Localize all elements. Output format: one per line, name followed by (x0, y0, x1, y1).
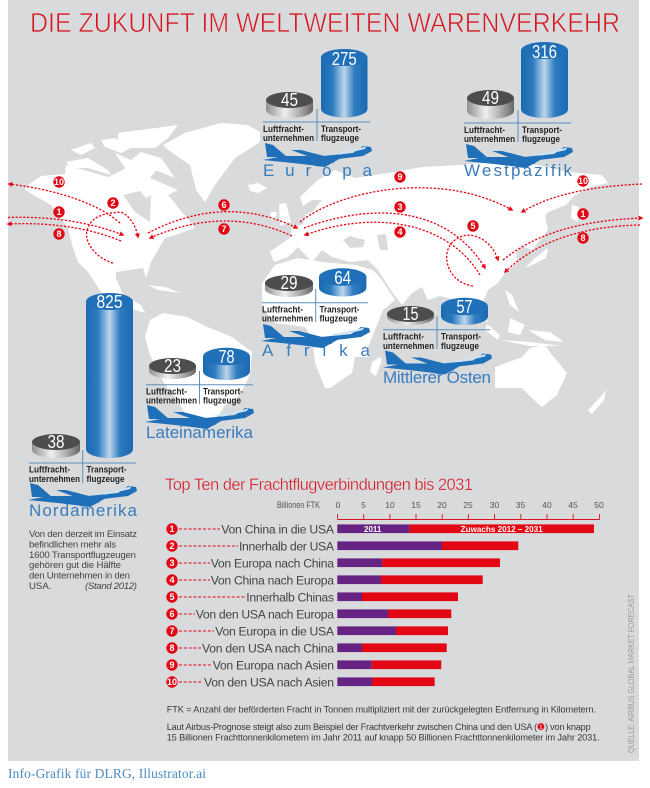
region block: Westpazifik: Luftfracht- (464, 125, 505, 136)
chart row 1: Von China in die USA (221, 522, 335, 536)
chart row 1: 1 (169, 524, 175, 534)
route number markers: 1 (56, 207, 62, 217)
region block: Nordamerika: 825 (96, 292, 122, 312)
region block: Europa: 45 (281, 90, 298, 110)
chart row 7: 7 (169, 626, 175, 636)
region block: Europa: unternehmen (263, 133, 314, 144)
region block: Lateinamerika: Lateinamerika (146, 423, 254, 442)
region block: Nordamerika: Transport- (86, 464, 126, 476)
chart row 6: 6 (169, 609, 175, 619)
region block: Mittlerer Osten: Transport- (441, 332, 481, 342)
text block: footnotes: Laut Airbus-Prognose steigt also zum Beispiel der Frachtverkehr zwischen China und den USA (❶) von knapp (167, 722, 591, 733)
region block: Westpazifik: Westpazifik (464, 161, 572, 180)
region block: Europa: Luftfracht- (263, 124, 304, 135)
chart title: Top Ten der Frachtflugverbindungen bis 2031 (165, 476, 473, 494)
region block: Europa (263, 49, 373, 180)
region block: Lateinamerika: 23 (164, 356, 181, 376)
footer credit: Info-Grafik für DLRG, Illustrator.ai (8, 766, 206, 781)
chart row 6 (166, 607, 451, 621)
bar chart axis: 10 (385, 500, 395, 510)
bar chart axis: 35 (516, 500, 525, 510)
region block: Lateinamerika: Luftfracht- (146, 386, 187, 398)
bar chart axis: Billionen FTK (277, 500, 320, 510)
region block: Afrika (261, 268, 371, 360)
chart row 3: Von Europa nach China (211, 556, 334, 570)
region block: Europa: flugzeuge (321, 133, 359, 144)
route number markers: 9 (397, 172, 403, 182)
route number markers: 7 (221, 224, 227, 234)
text block: note on North America: den Unternehmen in den (29, 570, 130, 582)
region block: Lateinamerika: unternehmen (146, 396, 197, 406)
region block: Westpazifik: 316 (532, 42, 557, 62)
chart row 8: 8 (169, 643, 175, 653)
region block: Mittlerer Osten: Mittlerer Osten (383, 368, 491, 387)
region block: Afrika: flugzeuge (320, 314, 358, 324)
region block: Lateinamerika: 78 (218, 347, 234, 367)
region block: Lateinamerika (145, 347, 254, 442)
region block: Europa: Europa (263, 161, 373, 180)
route number markers: 4 (397, 227, 403, 237)
text block: note on North America: gehören gut die Hälfte (29, 560, 121, 571)
chart row 7: Von Europa in die USA (215, 624, 335, 638)
region block: Nordamerika: 38 (48, 432, 64, 452)
chart row 8 (166, 641, 447, 655)
region block: Europa: 275 (332, 49, 357, 69)
chart row 10: Von den USA nach Asien (204, 675, 334, 689)
route number markers: 10 (54, 177, 64, 187)
bar chart axis: 0 (336, 500, 341, 510)
chart row 2: 2 (169, 541, 175, 551)
region block: Nordamerika: Nordamerika (29, 501, 138, 520)
text block: footnotes: FTK = Anzahl der beförderten Fracht in Tonnen multipliziert mit der zurückgelegten Entfernung in Kilometern. (167, 705, 596, 715)
route number markers: 2 (110, 198, 116, 208)
bar chart axis: 30 (490, 500, 499, 510)
region block: Europa: Transport- (321, 124, 361, 135)
route number markers: 1 (580, 209, 586, 219)
bar chart axis: 25 (463, 500, 473, 510)
region block: Mittlerer Osten (383, 297, 492, 387)
bar chart axis: 40 (542, 500, 552, 510)
world map (25, 123, 608, 430)
region block: Lateinamerika: Transport- (203, 386, 243, 398)
chart row 10: 10 (167, 677, 177, 687)
source credit: QUELLE: AIRBUS GLOBAL MARKET FORECAST (627, 594, 636, 753)
region block: Afrika: 64 (334, 268, 351, 288)
chart row 7 (166, 624, 448, 638)
chart row 5: Innerhalb Chinas (246, 590, 334, 604)
region block: Mittlerer Osten: flugzeuge (441, 341, 479, 352)
chart row 1 (166, 522, 594, 536)
chart row 1: 2011 (364, 525, 382, 534)
chart row 4: Von China nach Europa (211, 573, 334, 587)
route number markers: 3 (397, 202, 403, 212)
text block: note on North America: (Stand 2012) (85, 581, 137, 592)
route number markers: 6 (221, 200, 227, 210)
region block: Nordamerika: flugzeuge (86, 474, 124, 485)
text block: note on North America: befindlichen mehr als (29, 540, 116, 550)
region block: Westpazifik: flugzeuge (522, 134, 560, 145)
text block: note on North America (29, 529, 137, 592)
route number markers: 5 (470, 221, 476, 231)
chart row 2: Innerhalb der USA (239, 539, 335, 553)
region block: Mittlerer Osten: 15 (402, 304, 418, 324)
region block: Afrika: Afrika (262, 341, 371, 360)
chart row 9: Von Europa nach Asien (213, 658, 334, 672)
text block: note on North America: Von den derzeit im Einsatz (29, 529, 137, 540)
chart row 4: 4 (169, 575, 175, 585)
route number markers: 10 (578, 176, 588, 186)
chart row 9 (166, 658, 441, 672)
route number markers: 8 (56, 229, 62, 239)
bar chart axis (277, 500, 604, 520)
region block: Mittlerer Osten: 57 (456, 297, 472, 317)
region block: Westpazifik (464, 42, 573, 180)
region block: Mittlerer Osten: unternehmen (383, 341, 434, 352)
bar chart axis: 20 (437, 500, 447, 510)
route number markers (53, 171, 589, 244)
region block: Afrika: unternehmen (262, 314, 313, 324)
chart row 1: Zuwachs 2012 – 2031 (461, 525, 543, 534)
route number markers: 8 (580, 233, 586, 243)
chart row 4 (166, 573, 483, 587)
chart row 5 (166, 590, 458, 604)
text block: note on North America: USA. (29, 581, 51, 592)
region block: Westpazifik: 49 (482, 88, 499, 108)
bar chart axis: 15 (411, 500, 421, 510)
chart row 9: 9 (169, 660, 175, 670)
bar chart axis: 45 (568, 500, 578, 510)
text block: footnotes (167, 705, 600, 742)
bar chart axis: 50 (594, 500, 604, 510)
chart row 2 (166, 539, 518, 553)
region block: Afrika: 29 (280, 273, 298, 293)
chart row 8: Von den USA nach China (202, 641, 334, 655)
region block: Nordamerika (28, 292, 138, 520)
region block: Nordamerika: unternehmen (29, 474, 80, 485)
text block: footnotes: 15 Billionen Frachttonnenkilometern im Jahr 2011 auf knapp 50 Billionen Frachttonnenkilometer im Jahr 2031. (167, 732, 600, 742)
region block: Westpazifik: Transport- (522, 125, 562, 136)
region block: Afrika: Transport- (320, 304, 360, 316)
region block: Nordamerika: Luftfracht- (29, 464, 70, 476)
chart row 5: 5 (169, 592, 175, 602)
bar chart axis: 5 (361, 500, 366, 510)
chart row 3: 3 (169, 558, 175, 568)
chart row 10 (166, 675, 435, 689)
region block: Mittlerer Osten: Luftfracht- (383, 332, 424, 342)
region block: Afrika: Luftfracht- (262, 304, 303, 316)
chart row 3 (166, 556, 500, 570)
flight routes (8, 184, 642, 286)
region block: Lateinamerika: flugzeuge (203, 396, 241, 406)
chart row 6: Von den USA nach Europa (196, 607, 334, 621)
text block: note on North America: 1600 Transportflugzeugen (29, 550, 136, 561)
region block: Westpazifik: unternehmen (464, 134, 515, 145)
